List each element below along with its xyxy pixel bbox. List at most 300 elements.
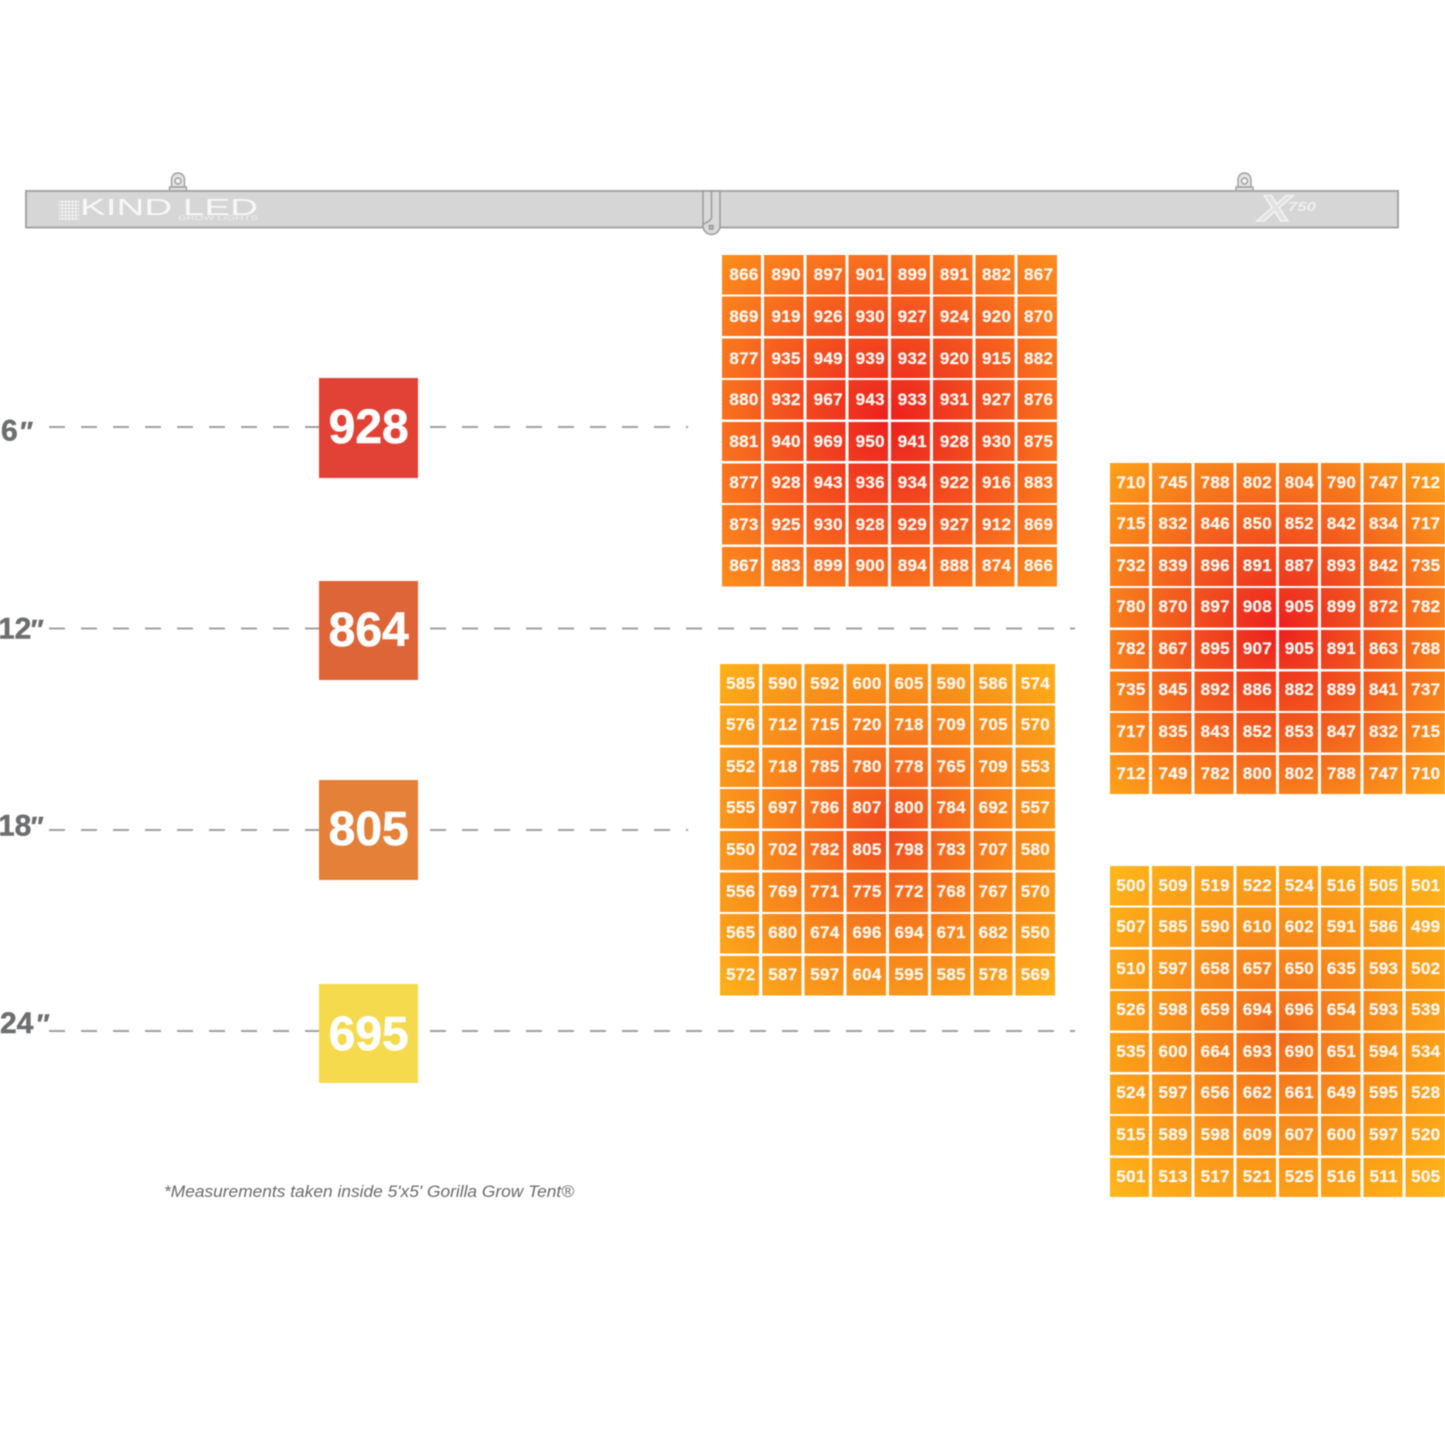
row 2: 919	[771, 307, 801, 326]
row 3: 882	[1024, 348, 1053, 368]
average value: 12 inch	[319, 581, 418, 680]
row 6: 922	[940, 473, 969, 492]
row 6: 662	[1243, 1083, 1272, 1102]
row 6: 877	[729, 473, 759, 492]
row 5: 895	[1201, 639, 1230, 658]
row 6: 928	[771, 473, 801, 492]
row 7: 607	[1285, 1125, 1314, 1144]
row 5: 690	[1285, 1042, 1314, 1061]
row 1: 897	[814, 265, 843, 284]
row 7: 715	[1411, 722, 1440, 741]
row 4: 659	[1201, 1000, 1230, 1019]
row 5: 798	[894, 840, 924, 859]
row 5: 702	[768, 840, 797, 859]
row 6: 735	[1116, 680, 1146, 699]
row 5: 928	[940, 432, 969, 451]
row 1: 505	[1369, 876, 1398, 895]
row 5: 651	[1327, 1042, 1356, 1061]
row 5: 867	[1158, 639, 1188, 658]
heatmap: 12 inch	[1110, 463, 1445, 794]
row 4: 870	[1158, 597, 1188, 616]
light bar fixture	[26, 173, 1398, 234]
row 7: 694	[894, 923, 924, 942]
row 2: 586	[1369, 917, 1398, 936]
row 6: 775	[852, 882, 882, 901]
row 7: 927	[940, 515, 969, 534]
row 6	[1116, 1083, 1440, 1102]
row 6: 886	[1243, 680, 1272, 699]
row 1: 891	[940, 265, 969, 284]
row 2: 602	[1285, 917, 1314, 936]
row 4: 905	[1285, 597, 1314, 616]
row 8: 513	[1158, 1167, 1188, 1186]
row 4	[726, 798, 1050, 817]
row 6	[1116, 680, 1440, 699]
row 7: 597	[1369, 1125, 1398, 1144]
row 7: 565	[726, 923, 755, 942]
row 4: 782	[1411, 597, 1440, 616]
row 5: 941	[898, 432, 927, 451]
row 7: 600	[1327, 1125, 1356, 1144]
row 8: 578	[979, 965, 1008, 984]
row 2: 717	[1411, 514, 1440, 533]
row 8: 888	[940, 556, 969, 575]
row 3: 658	[1201, 959, 1230, 978]
row 3: 732	[1116, 556, 1146, 575]
row 6: 845	[1158, 680, 1188, 699]
row 8: 788	[1327, 764, 1356, 783]
row 1: 710	[1116, 473, 1146, 492]
logo tagline: GROW LIGHTS	[178, 215, 259, 222]
row 6: 767	[979, 882, 1008, 901]
row 6: 556	[726, 882, 755, 901]
row 2: 930	[856, 307, 885, 326]
row 7: 853	[1285, 722, 1314, 741]
row 6: 661	[1285, 1083, 1314, 1102]
row 7: 598	[1201, 1125, 1230, 1144]
row 7: 671	[937, 923, 966, 942]
row 4: 908	[1243, 597, 1272, 616]
row 7: 682	[979, 923, 1008, 942]
row 2: 924	[940, 307, 969, 326]
row 3: 657	[1243, 959, 1272, 978]
row 2: 507	[1116, 917, 1146, 936]
row 2: 842	[1327, 514, 1356, 533]
row 6: 524	[1116, 1083, 1146, 1102]
row 8: 511	[1369, 1167, 1398, 1186]
row 3	[1116, 556, 1440, 575]
row 8: 782	[1201, 764, 1230, 783]
row 5: 940	[771, 432, 801, 451]
row 4: 526	[1116, 1000, 1146, 1019]
logo 750: 750	[1288, 199, 1317, 214]
hanger: right	[1236, 173, 1253, 191]
row 3: 510	[1116, 959, 1146, 978]
row 8: 569	[1021, 965, 1050, 984]
average value: 6 inch: 928	[329, 401, 409, 454]
row 5	[1116, 1042, 1441, 1061]
row 8: 505	[1411, 1167, 1440, 1186]
row 6: 934	[898, 473, 927, 492]
row 5: 863	[1369, 639, 1398, 658]
row 8: 516	[1327, 1167, 1356, 1186]
row 3: 887	[1285, 556, 1314, 575]
row 8	[726, 965, 1050, 984]
row 4: 696	[1285, 1000, 1314, 1019]
row 5: 805	[852, 840, 882, 859]
row 5: 664	[1201, 1042, 1230, 1061]
row 5: 594	[1369, 1042, 1398, 1061]
row 6: 882	[1285, 680, 1314, 699]
row 6: 570	[1021, 882, 1050, 901]
row 2	[1116, 514, 1440, 533]
row 2: 920	[982, 307, 1011, 326]
row 8: 712	[1116, 764, 1146, 783]
row 8: 521	[1243, 1167, 1272, 1186]
row 3: 842	[1369, 556, 1398, 575]
row 7	[726, 923, 1050, 942]
row 7: 847	[1327, 722, 1356, 741]
row 4: 872	[1369, 597, 1398, 616]
row 2: 709	[937, 715, 966, 734]
row 3: 553	[1021, 757, 1050, 776]
row 1: 899	[898, 265, 927, 284]
row 1: 574	[1021, 674, 1050, 693]
row 5: 788	[1411, 639, 1440, 658]
row 7: 912	[982, 515, 1011, 534]
row 4	[1116, 1000, 1440, 1019]
row 7: 515	[1116, 1125, 1146, 1144]
row 7: 674	[810, 923, 840, 942]
row 1	[729, 265, 1054, 284]
row 1: 790	[1327, 473, 1356, 492]
row 4: 932	[771, 390, 801, 409]
row 7: 852	[1243, 722, 1272, 741]
average value: 24 inch	[319, 984, 418, 1083]
row 1: 592	[810, 674, 840, 693]
row 7: 832	[1369, 722, 1398, 741]
row 2: 590	[1201, 917, 1230, 936]
row 1: 500	[1116, 876, 1146, 895]
row 3: 635	[1327, 959, 1356, 978]
row 8	[729, 556, 1054, 575]
row 1: 890	[771, 265, 801, 284]
footnote: *Measurements taken inside 5'x5' Gorilla Grow Tent®	[164, 1182, 574, 1201]
row 8: 899	[814, 556, 843, 575]
row 6: 528	[1411, 1083, 1440, 1102]
row 1: 901	[856, 265, 885, 284]
row 3: 839	[1158, 556, 1188, 575]
row 5: 930	[982, 432, 1011, 451]
row 4: 807	[852, 798, 882, 817]
row 4: 780	[1116, 597, 1146, 616]
row 3: 893	[1327, 556, 1356, 575]
row 6: 892	[1201, 680, 1230, 699]
row 4: 784	[937, 798, 966, 817]
row 5: 891	[1327, 639, 1356, 658]
label 24 inch: 24″	[0, 1007, 49, 1040]
row 7: 873	[729, 515, 759, 534]
row 3: 718	[768, 757, 797, 776]
row 5: 580	[1021, 840, 1050, 859]
row 1: 501	[1411, 876, 1440, 895]
row 4: 880	[729, 390, 759, 409]
row 8: 587	[768, 965, 797, 984]
row 2: 715	[1116, 514, 1146, 533]
row 3: 939	[856, 348, 885, 368]
row 5	[1116, 639, 1440, 658]
row 8: 874	[982, 556, 1011, 575]
row 7: 550	[1021, 923, 1050, 942]
row 4: 931	[940, 390, 969, 409]
logo: KIND LED	[59, 194, 259, 222]
row 8: 800	[1243, 764, 1272, 783]
logo icon: dot grid	[59, 200, 79, 220]
row 4: 598	[1158, 1000, 1188, 1019]
average value: 12 inch: 864	[329, 604, 409, 657]
row 2: 718	[894, 715, 924, 734]
row 5: 782	[1116, 639, 1146, 658]
row 6: 769	[768, 882, 797, 901]
center bracket	[703, 191, 720, 234]
row 1: 804	[1285, 473, 1314, 492]
row 8: 501	[1116, 1167, 1146, 1186]
row 7: 609	[1243, 1125, 1272, 1144]
row 7: 680	[768, 923, 797, 942]
row 1: 882	[982, 265, 1011, 284]
row 6: 771	[810, 882, 840, 901]
row 5	[729, 432, 1054, 451]
row 5: 905	[1285, 639, 1314, 658]
row 3: 765	[937, 757, 966, 776]
row 5: 550	[726, 840, 755, 859]
row 2: 834	[1369, 514, 1398, 533]
row 3: 597	[1158, 959, 1188, 978]
row 1	[1116, 876, 1441, 895]
logo X: X	[1256, 188, 1294, 229]
row 2: 499	[1411, 917, 1440, 936]
row 2: 852	[1285, 514, 1314, 533]
row 8: 883	[771, 556, 801, 575]
row 8: 802	[1285, 764, 1314, 783]
height labels	[0, 414, 49, 1040]
row 7	[1116, 1125, 1440, 1144]
row 3	[726, 757, 1050, 776]
row 3: 877	[729, 348, 759, 368]
row 2: 712	[768, 715, 797, 734]
row 2: 705	[979, 715, 1008, 734]
row 1: 866	[729, 265, 759, 284]
row 4: 897	[1201, 597, 1230, 616]
hanger: left	[170, 173, 186, 191]
row 4: 876	[1024, 390, 1053, 409]
row 3: 778	[894, 757, 924, 776]
row 2: 610	[1243, 917, 1272, 936]
row 6: 889	[1327, 680, 1356, 699]
row 6: 737	[1411, 680, 1440, 699]
row 8: 525	[1285, 1167, 1314, 1186]
row 5	[726, 840, 1050, 859]
row 7: 930	[814, 515, 843, 534]
row 6: 597	[1158, 1083, 1188, 1102]
row 7: 696	[852, 923, 882, 942]
row 1: 590	[768, 674, 797, 693]
row 4: 933	[898, 390, 927, 409]
row 4: 593	[1369, 1000, 1398, 1019]
row 7: 717	[1116, 722, 1146, 741]
row 3: 915	[982, 348, 1011, 368]
row 4: 927	[982, 390, 1011, 409]
row 4: 557	[1021, 798, 1050, 817]
row 1	[1116, 473, 1440, 492]
row 5: 950	[856, 432, 885, 451]
row 1: 867	[1024, 265, 1053, 284]
row 3: 949	[814, 348, 843, 368]
row 8: 572	[726, 965, 755, 984]
row 1: 519	[1201, 876, 1230, 895]
row 7: 928	[856, 515, 885, 534]
average value: 18 inch: 805	[329, 803, 409, 856]
row 3: 552	[726, 757, 755, 776]
row 3: 709	[979, 757, 1008, 776]
row 3	[729, 348, 1054, 368]
row 8: 517	[1201, 1167, 1230, 1186]
row 6: 772	[894, 882, 924, 901]
row 6: 943	[814, 473, 843, 492]
row 3: 502	[1411, 959, 1440, 978]
row 2: 576	[726, 715, 755, 734]
logo wordmark: KIND LED	[80, 194, 258, 220]
row 2: 869	[729, 307, 759, 326]
row 5: 600	[1158, 1042, 1188, 1061]
row 8: 894	[898, 556, 927, 575]
row 4: 899	[1327, 597, 1356, 616]
row 8: 747	[1369, 764, 1398, 783]
row 2: 870	[1024, 307, 1053, 326]
row 4	[729, 390, 1054, 409]
row 1: 516	[1327, 876, 1356, 895]
row 3: 932	[898, 348, 927, 368]
average value: 6 inch	[319, 378, 418, 478]
row 5: 875	[1024, 432, 1053, 451]
row 3: 920	[940, 348, 969, 368]
row 1: 524	[1285, 876, 1314, 895]
average value: 24 inch: 695	[329, 1008, 409, 1061]
row 4: 555	[726, 798, 755, 817]
heatmap: 24 inch	[1110, 866, 1445, 1197]
row 2: 585	[1158, 917, 1188, 936]
row 2: 926	[814, 307, 843, 326]
row 8: 866	[1024, 556, 1053, 575]
label 6 inch: 6″	[1, 414, 33, 448]
row 8: 597	[810, 965, 840, 984]
row 2: 715	[810, 715, 840, 734]
row 4: 694	[1243, 1000, 1272, 1019]
row 4: 539	[1411, 1000, 1440, 1019]
row 3: 935	[771, 348, 801, 368]
row 7	[729, 515, 1054, 534]
row 6	[729, 473, 1054, 492]
heatmap: 6 inch	[722, 255, 1057, 587]
row 1: 788	[1201, 473, 1230, 492]
row 5: 881	[729, 432, 759, 451]
row 4: 943	[856, 390, 885, 409]
row 8: 585	[937, 965, 966, 984]
row 7: 589	[1158, 1125, 1188, 1144]
row 4	[1116, 597, 1440, 616]
row 7: 869	[1024, 515, 1053, 534]
row 3: 780	[852, 757, 882, 776]
row 1: 747	[1369, 473, 1398, 492]
row 6: 649	[1327, 1083, 1356, 1102]
row 3: 785	[810, 757, 840, 776]
row 8: 710	[1411, 764, 1440, 783]
row 5: 534	[1411, 1042, 1440, 1061]
bar body	[26, 191, 1398, 228]
row 2	[1116, 917, 1440, 936]
heatmap: 18 inch	[720, 664, 1054, 996]
row 2: 832	[1158, 514, 1188, 533]
row 8: 749	[1158, 764, 1188, 783]
row 5: 707	[979, 840, 1008, 859]
row 2	[726, 715, 1050, 734]
row 8	[1116, 764, 1440, 783]
row 6: 841	[1369, 680, 1398, 699]
row 7: 929	[898, 515, 927, 534]
row 1: 712	[1411, 473, 1440, 492]
row 5: 783	[937, 840, 966, 859]
row 5: 782	[810, 840, 840, 859]
row 7	[1116, 722, 1440, 741]
row 4: 654	[1327, 1000, 1356, 1019]
row 3: 891	[1243, 556, 1272, 575]
row 1: 522	[1243, 876, 1272, 895]
row 2: 570	[1021, 715, 1050, 734]
row 8: 900	[856, 556, 885, 575]
row 3: 896	[1201, 556, 1230, 575]
row 4: 800	[894, 798, 924, 817]
row 1: 585	[726, 674, 755, 693]
average value: 18 inch	[319, 780, 418, 880]
row 7: 925	[771, 515, 801, 534]
row 4: 692	[979, 798, 1008, 817]
row 1: 600	[852, 674, 882, 693]
row 3: 593	[1369, 959, 1398, 978]
row 7: 835	[1158, 722, 1188, 741]
row 4: 967	[814, 390, 843, 409]
row 1: 745	[1158, 473, 1188, 492]
row 1: 605	[894, 674, 924, 693]
row 3: 650	[1285, 959, 1314, 978]
row 1: 802	[1243, 473, 1272, 492]
row 2: 720	[852, 715, 882, 734]
row 6: 883	[1024, 473, 1053, 492]
row 5: 693	[1243, 1042, 1272, 1061]
row 6: 768	[937, 882, 966, 901]
row 7: 520	[1411, 1125, 1440, 1144]
row 1: 509	[1158, 876, 1188, 895]
row 2	[729, 307, 1054, 326]
row 6: 656	[1201, 1083, 1230, 1102]
row 1	[726, 674, 1051, 693]
logo: X750	[1256, 188, 1317, 229]
dashed level lines	[49, 427, 1075, 1031]
row 5: 535	[1116, 1042, 1146, 1061]
row 4: 697	[768, 798, 797, 817]
row 1: 590	[937, 674, 966, 693]
row 8: 595	[894, 965, 924, 984]
row 2: 850	[1243, 514, 1272, 533]
